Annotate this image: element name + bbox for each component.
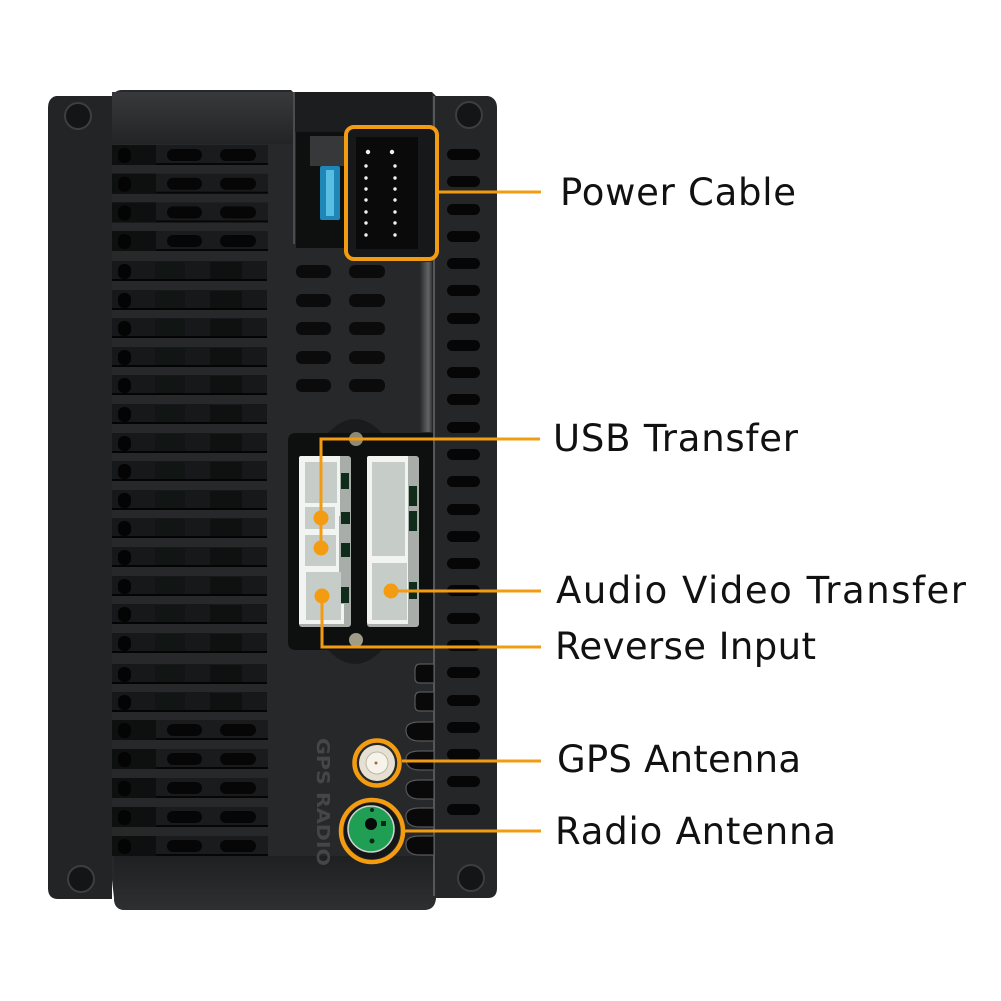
- ventilation holes, right plate: [447, 149, 480, 815]
- GPS highlight and leader: [354, 740, 541, 786]
- power connector highlight: [346, 127, 437, 259]
- corner screws: [65, 102, 484, 892]
- leader: audio video transfer: [384, 584, 541, 598]
- label: USB Transfer: USB Transfer: [553, 417, 799, 460]
- right white connector block: [367, 456, 419, 627]
- fuse housing: [296, 132, 348, 248]
- power connector: [347, 129, 435, 258]
- right mounting plate: [432, 96, 497, 898]
- central chassis: [112, 90, 436, 910]
- radio antenna socket: [344, 803, 400, 859]
- label: Reverse Input: Reverse Input: [555, 625, 816, 668]
- embossed GPS RADIO text: GPS RADIO: [312, 738, 333, 866]
- ventilation slots, left and centre: [112, 145, 385, 856]
- radio highlight and leader: [341, 800, 541, 862]
- label: Audio Video Transfer: Audio Video Transfer: [556, 569, 967, 612]
- GPS SMA connector: [359, 745, 395, 781]
- metal edge highlight: [420, 262, 432, 432]
- left mounting plate: [48, 96, 112, 899]
- label: Power Cable: Power Cable: [560, 171, 796, 214]
- leader: reverse input: [314, 588, 541, 647]
- label: GPS Antenna: GPS Antenna: [557, 738, 801, 781]
- side notches near antennas: [406, 664, 434, 855]
- connector bay: [288, 419, 433, 664]
- leader: power cable: [437, 190, 541, 194]
- leader: USB transfer: [314, 439, 540, 556]
- left white connector block: [299, 456, 351, 627]
- label: Radio Antenna: Radio Antenna: [555, 810, 836, 853]
